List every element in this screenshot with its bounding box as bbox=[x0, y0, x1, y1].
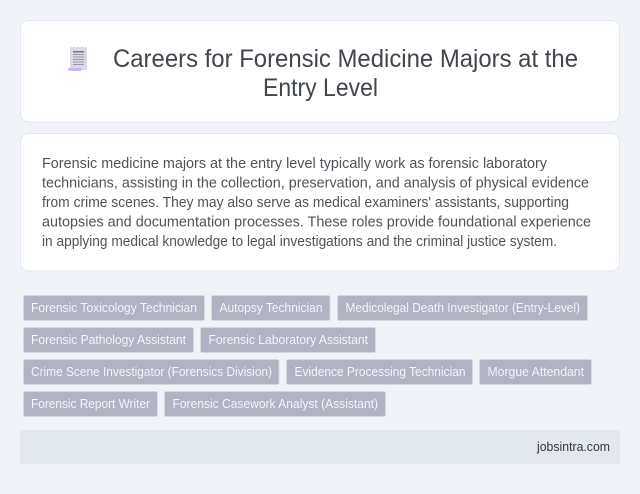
description text: autopsies and documentation processes. These roles provide foundational experience bbox=[42, 214, 591, 230]
tag: Autopsy Technician: Autopsy Technician bbox=[220, 301, 323, 315]
footer source text: jobsintra.com bbox=[536, 440, 610, 454]
description panel bbox=[20, 134, 620, 271]
tag: Morgue Attendant bbox=[480, 360, 592, 384]
tag: Forensic Toxicology Technician bbox=[24, 296, 204, 320]
tag: Forensic Report Writer: Forensic Report Writer bbox=[31, 397, 150, 411]
tag: Forensic Pathology Assistant: Forensic Pathology Assistant bbox=[31, 333, 187, 347]
tag: Evidence Processing Technician bbox=[286, 360, 472, 384]
icon: forensic report document bbox=[68, 47, 87, 71]
tag: Crime Scene Investigator bbox=[24, 360, 279, 384]
title: Entry Level bbox=[263, 74, 378, 102]
tag: Forensic Casework Analyst: Forensic Casework Analyst (Assistant) bbox=[172, 397, 378, 411]
description text: from crime scenes. They may also serve as medical examiners' assistants, supporting bbox=[42, 195, 569, 211]
footer bar bbox=[20, 430, 620, 464]
description text: technicians, assisting in the collection, preservation, and analysis of physical evidence bbox=[42, 176, 589, 192]
tag: Medicolegal Death Investigator bbox=[338, 296, 588, 320]
tag: Morgue Attendant: Morgue Attendant bbox=[488, 365, 585, 379]
description text bbox=[42, 156, 591, 250]
description text: in applying medical knowledge to legal investigations and the criminal justice system. bbox=[42, 234, 557, 250]
tag: Evidence Processing Technician: Evidence Processing Technician bbox=[294, 365, 466, 379]
tag: Forensic Casework Analyst bbox=[164, 392, 386, 416]
title bbox=[113, 45, 578, 102]
tag: Medicolegal Death Investigator: Medicolegal Death Investigator (Entry-Level) bbox=[346, 301, 580, 315]
tag: Autopsy Technician bbox=[212, 296, 330, 320]
tag: Forensic Report Writer bbox=[24, 392, 158, 416]
tag: Forensic Toxicology Technician: Forensic Toxicology Technician bbox=[31, 301, 197, 315]
tag: Forensic Pathology Assistant bbox=[24, 328, 194, 352]
header panel bbox=[20, 20, 620, 122]
tag: Crime Scene Investigator: Crime Scene Investigator (Forensics Division) bbox=[31, 365, 272, 379]
title: Careers for Forensic Medicine Majors at the bbox=[113, 45, 578, 73]
description text: Forensic medicine majors at the entry level typically work as forensic laboratory bbox=[42, 156, 548, 172]
tag: Forensic Laboratory Assistant bbox=[200, 328, 376, 352]
tag: Forensic Laboratory Assistant: Forensic Laboratory Assistant bbox=[208, 333, 368, 347]
career tags bbox=[24, 296, 592, 416]
